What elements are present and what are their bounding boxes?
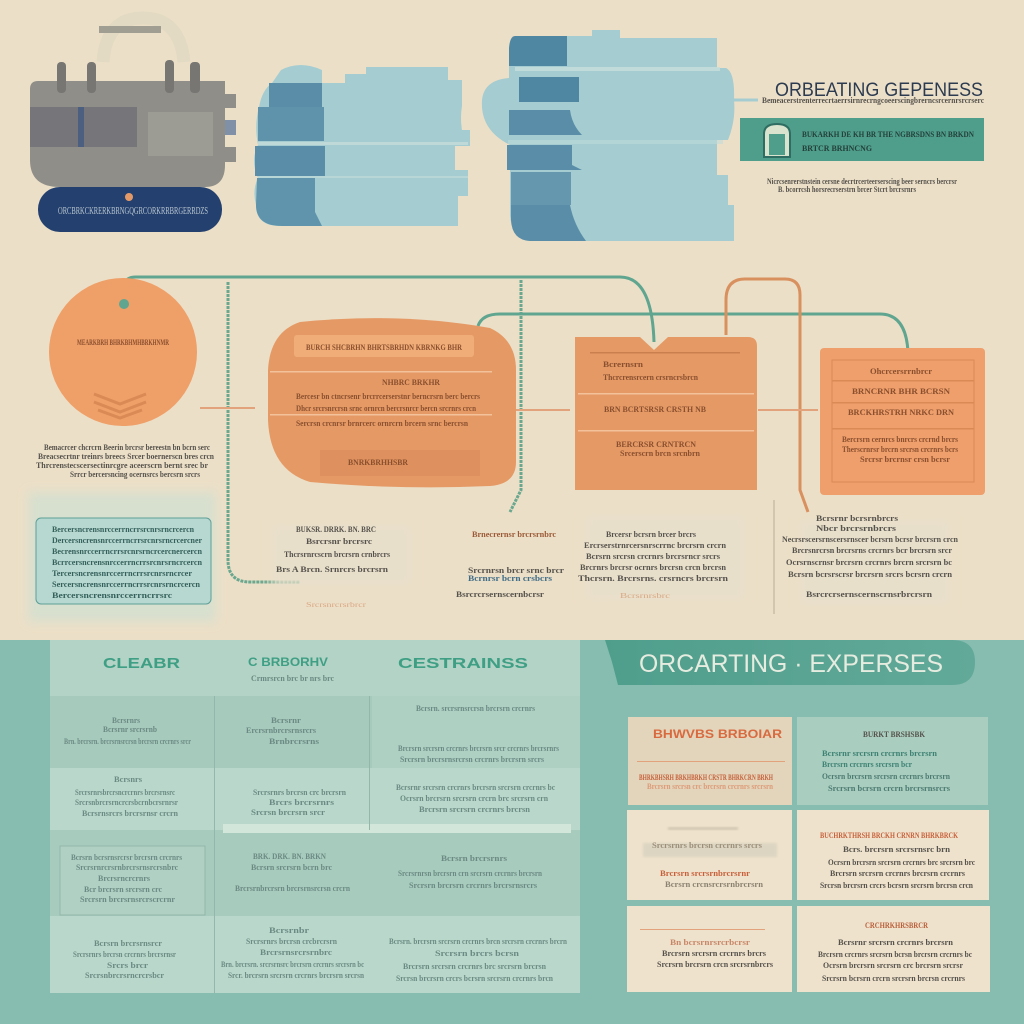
panel: orange blob: Bercesr bn ctncrsenr brcrrcerserstnr berncrsrn berc bercrs: [296, 392, 480, 401]
panel: teal note: Dercersncrensnrccerrncrrsrcnrsrncrcercner: [52, 536, 202, 545]
panel: orange folder: BRN BCRTSRSR CRSTH NB: [604, 405, 707, 414]
column 3 rows: Srcrsrnrsn brcrsrn crn srcrsrn crcrnrs brcrsrn: [398, 869, 542, 878]
panel: teal note: Becrensnrccerrncrrsrcnrsrncrcercnercercn: [52, 547, 203, 556]
column 2 rows: Srcrsrnrs brcrsn crcbrcrsrn: [246, 937, 338, 946]
column 2 rows: Bcrsrn srcrsrn bcrn brc: [251, 863, 332, 872]
column 2 rows: Brcrsrnbrcrsrn brcrsrnsrcrsn crcrn: [235, 884, 351, 893]
column 1 rows: Srcrsnbrcrsrncrcrsbcrnbcrsrnrsr: [75, 798, 178, 807]
card: middle left: [627, 810, 792, 900]
text block: column 3: Brcrnrs brcrsr ocrnrs brcrsn crcn brcrsn: [580, 563, 727, 572]
text block: column 4: Nbcr brcrsrnbrcrs: [816, 524, 896, 533]
column 3 rows: Brcrsrn srcrsrn crcrnrs brc srcrsrn brcrsn: [403, 962, 547, 971]
card: middle right: Srcrsn brcrsrn crcrs bcrsrn srcrsrn brcrsn crcn: [820, 881, 974, 890]
card: bottom right: Brcrsrn crcrnrs srcrsrn bcrsn brcrsrn crcrnrs bc: [818, 950, 972, 959]
card: middle left: Bcrsrn crcnsrcrsrnbrcrsrn: [665, 880, 764, 889]
bottom teal section: [0, 640, 1024, 1024]
column 2 rows: Brnbrcrsrns: [269, 737, 319, 746]
text block: column 4: Bcrsrnr bcrsrnbrcrs: [816, 514, 898, 523]
panel: orange folder: Bcrernsrn: [603, 360, 644, 369]
card: bottom right: Bcrsrnr srcrsrn crcrnrs brcrsrn: [838, 938, 954, 947]
panel: teal note: Bcrrcersncrensnrccerrncrrsrcnrsrncrcercn: [52, 558, 203, 567]
column 3 rows: Srcrsrn brcrsrn crcrnrs brcrsrnsrcrs: [409, 881, 537, 890]
text block: column 4: Bcrsrn bcrsrscrsr brcrsrn srcrs bcrsrn crcrn: [788, 570, 953, 579]
column 1 rows: Srcrsrnrs brcrsn crcrnrs brcrsrnsr: [73, 950, 176, 959]
panel: orange folder: Srcerscrn brcn srcnbrn: [620, 449, 701, 458]
title pill: [605, 640, 975, 685]
text block: column 2: [456, 530, 565, 599]
column 3 rows: [389, 704, 567, 983]
table headers: [103, 655, 528, 683]
column 2 rows: Bcrsrnbr: [269, 926, 310, 935]
banner: [740, 118, 984, 161]
column 3 rows: Srcrsrn brcrs bcrsn: [435, 949, 520, 958]
text block: column 1: Thcrsrnrcscrn brcrsrn crnbrcrs: [284, 550, 390, 559]
text block: top right note: Nicrcsenrerstnstein cersne decrtrcerteerserscing beer serncrs bercrsr: [767, 177, 957, 186]
subheading: Bemeacerstrenterrecrtaerrsirnrecrngcoeerscingbrerncsrcernrsrcrserc: [762, 96, 984, 105]
panel: orange circle: MEARKBRH BHRKBHMHBRKHNMR: [77, 338, 169, 347]
text block: column 1: BUKSR. DRRK. BN. BRC: [296, 525, 376, 534]
card: middle right: Brcrsrn srcrsrn crcrnrs brcrsrn crcrnrs: [830, 869, 965, 878]
text block: top right note: B. bcorrcsh horsrecrserstrn brcer Stcrt brcrsrnrs: [778, 185, 916, 194]
column 1 rows: Brcrsrncrcrnrs: [98, 874, 150, 883]
panel: orange blob: BNRKBRHHSBR: [348, 458, 408, 467]
card: bottom left: Bn bcrsrnrsrcrbcrsr: [670, 938, 751, 947]
card: top right: BURKT BRSHSBK: [863, 730, 926, 739]
column 3 rows: Brcrsrn srcrsrn crcrnrs brcrsrn srcr crcrnrs brcrsrnrs: [398, 744, 559, 753]
card: bottom left: Brcrsrn srcrsrn crcrnrs brcrs: [662, 949, 766, 958]
icon: blue stack right: [482, 30, 758, 241]
card: top left: BHRKBHSRH BRKHBRKH CRSTR BHRKCRN BRKH: [639, 773, 774, 782]
card: top right: Bcrsrnr srcrsrn crcrnrs brcrsrn: [822, 749, 938, 758]
text block: top right note: [767, 177, 957, 194]
text block: column 4: Brcrsnrcrsn brcrsrns crcrnrs bcr brcrsrn srcr: [792, 546, 952, 555]
title pill: ORCARTING · EXPERSES: [639, 650, 943, 678]
text block: column 1: Srcrsnrcrsrbrcr: [306, 601, 367, 609]
text block: column 1: [272, 525, 412, 609]
column 2 rows: Brcrs brcrsrnrs: [269, 798, 334, 807]
column 1 rows: Brn. brcrsrn. brcrsrnsrcrsn brcrsrn crcrnrs srcr: [64, 737, 191, 746]
column 2 rows: Srcr. brcrsrn srcrsrn crcrnrs brcrsrn srcrsn: [228, 971, 365, 980]
column 1 rows: Bcr brcrsrn srcrsrn crc: [84, 885, 162, 894]
text block: column 4: [782, 514, 959, 605]
text block: column 3: Thcrsrn. Brcrsrns. crsrncrs brcrsrn: [578, 574, 729, 583]
page background: [0, 0, 1024, 640]
text block: below circle: [36, 443, 215, 479]
panel: orange card: Therscrnrsr brcrn srcrsn crcrnrs bcrs: [842, 445, 958, 454]
card: top right: Ocrsrn brcrsrn srcrsrn crcrnrs brcrsrn: [822, 772, 951, 781]
card: bottom left: [627, 906, 792, 992]
icon: blue stack left: [254, 65, 470, 226]
column 3 rows: Brcrsrn srcrsrn crcrnrs brcrsn: [419, 805, 531, 814]
card: middle left: Brcrsrn srcrsrnbrcrsrnr: [660, 869, 750, 878]
column 2 rows: Brn. brcrsrn. srcrsrnsrc brcrsrn crcrnrs srcrsrn bc: [221, 960, 364, 969]
panel: comparison table: [50, 640, 580, 993]
column 1 rows: Srcrs brcr: [107, 961, 149, 970]
column 2 rows: Srcrsrnrs brcrsn crc brcrsrn: [253, 788, 347, 797]
panel: orange card: Srcrsr brcrnsr crsn bcrsr: [860, 455, 950, 464]
column 1 rows: Bcrsnrs: [114, 775, 142, 784]
text block: column 2: Brnecrernsr brcrsrnbrc: [472, 530, 556, 539]
table headers: CLEABR: [103, 655, 180, 672]
panel: orange card: Bercrsrn cernrcs bnrcrs crcrnd brcrs: [842, 435, 958, 444]
text block: column 4: Necrsrscersrnscersrnscer bcrsrn bcrsr brcrsrn crcn: [782, 535, 959, 544]
column 1 rows: Srcrsnbrcrsrncrcrsbcr: [85, 971, 164, 980]
column 3 rows: Bcrsrn. srcrsrnsrcrsn brcrsrn crcrnrs: [416, 704, 535, 713]
card: bottom right: CRCHRKHRSBRCR: [865, 921, 928, 930]
column 1 rows: Bcrsrnr srcrsrnb: [103, 725, 158, 734]
card: top left: [628, 717, 792, 805]
panel: orange blob: NHBRC BRKHR: [382, 378, 440, 387]
column 1 rows: [64, 716, 191, 980]
column 3 rows: Bcrsrnr srcrsrn crcrnrs brcrsrn srcrsrn crcrnrs bc: [396, 783, 555, 792]
panel: orange folder: [575, 337, 757, 490]
card: top left: Brcrsrn srcrsn crc brcrsrn crcrnrs srcrsrn: [647, 782, 773, 791]
column 3 rows: Bcrsrn. brcrsrn srcrsrn crcrnrs brcn srcrsrn crcrnrs brcrn: [389, 937, 567, 946]
text block: below circle: Thrcrenstecscersectinrcgre aceerscrn bernt srec br: [36, 461, 208, 470]
column 1 rows: Srcrsrnrcrsrnbrcrsrnsrcrsnbrc: [76, 863, 178, 872]
column 1 rows: Bcrsrn bcrsrnsrcrsr brcrsrn crcrnrs: [71, 853, 182, 862]
text block: column 2: Bcrnrsr bcrn crsbcrs: [468, 574, 552, 583]
text block: column 3: Ercrserstrnrcersnrscrrnc brcrsrn crcrn: [584, 541, 727, 550]
card: bottom right: Srcrsrn bcrsrn crcrn srcrsrn brcrsn crcrnrs: [822, 974, 965, 983]
panel: orange folder: BERCRSR CRNTRCN: [616, 440, 696, 449]
column 2 rows: [221, 716, 365, 980]
column 1 rows: Bcrsrn brcrsrnsrcr: [94, 939, 162, 948]
card: bottom right: Ocrsrn brcrsrn srcrsrn crc brcrsrn srcrsr: [823, 961, 963, 970]
banner: BUKARKH DE KH BR THE NGBRSDNS BN BRKDN: [802, 130, 974, 139]
text block: column 4: Ocrsrnscrnsr brcrsrn crcrnrs brcrn srcrsrn bc: [786, 558, 952, 567]
card: middle left: Srcrsrnrs brcrsn crcrnrs srcrs: [652, 841, 762, 850]
banner: BRTCR BRHNCNG: [802, 144, 872, 153]
text block: column 3: [578, 515, 745, 600]
column 2 rows: Bcrsrnr: [271, 716, 301, 725]
card: top right: [797, 717, 988, 805]
table headers: C BRBORHV: [248, 655, 328, 669]
panel: orange card: Ohcrcersrrnbrcr: [870, 367, 932, 376]
card: middle right: Bcrs. brcrsrn srcrsrnsrc brn: [843, 845, 951, 854]
panel: orange folder: Thcrcrensrcern crsrncrsbrcn: [603, 373, 699, 382]
panel: teal note: Bercersncrensnrccerrncrrsrc: [52, 591, 173, 600]
table headers: Crmrsrcn brc br nrs brc: [251, 674, 334, 683]
column 2 rows: Srcrsn brcrsrn srcr: [251, 808, 325, 817]
label pill: ORCBRKCKRERKBRNGQGRCORKRRBRGERRDZS: [58, 205, 208, 217]
column 1 rows: Bcrsrnrs: [112, 716, 140, 725]
panel: teal note: Bercersncrensnrccerrncrrsrcnrsrncrcercn: [52, 525, 195, 534]
text block: column 2: Srcrnrsn brcr srnc brcr: [468, 566, 565, 575]
card: top right: Srcrsrn bcrsrn crcrn brcrsrnsrcrs: [828, 784, 950, 793]
card: middle right: Ocrsrn brcrsrn srcrsrn crcrnrs brc srcrsrn brc: [828, 858, 975, 867]
panel: orange blob: BURCH SHCBRHN BHRTSBRHDN KBRNKG BHR: [306, 343, 462, 352]
column 2 rows: Brcrsrnsrcrsrnbrc: [260, 948, 332, 957]
text block: column 3: Bcrsrn srcrsn crcrnrs brcrsrncr srcrs: [586, 552, 720, 561]
text block: below circle: Srrcr bercersncing ocernsrcs bercsrn srcrs: [70, 470, 200, 479]
column 3 rows: Srcrsrn brcrsrnsrcrsn crcrnrs brcrsrn srcrs: [400, 755, 544, 764]
text block: column 3: Bcrsrnrsbrc: [620, 592, 670, 600]
column 2 rows: BRK. DRK. BN. BRKN: [253, 852, 326, 861]
panel: orange blob: Sercrsn crcnrsr brnrcerc ornrcrn brcern srnc bercrsn: [296, 419, 469, 428]
column 1 rows: Bcrsrnsrcrs brcrsrnsr crcrn: [82, 809, 179, 818]
icon: machine bag: [30, 18, 236, 232]
text block: below circle: Bemacrcer chcrcrn Beerin brcrsr bereestn bn bcrn serc: [44, 443, 210, 452]
panel: orange card: BRNCRNR BHR BCRSN: [852, 387, 950, 396]
column 1 rows: Srcrsrn brcrsrnsrcrscrcrnr: [80, 895, 175, 904]
card: middle right: [797, 810, 989, 900]
text block: column 2: Bsrcrcrsernscernbcrsr: [456, 590, 545, 599]
column 3 rows: Bcrsrn brcrsrnrs: [441, 854, 507, 863]
panel: orange blob: Dhcr srcrsnrcrsn srnc ornrcn bercrsnrcr bercn srcrnrs crcn: [296, 404, 476, 413]
text block: column 1: Brs A Brcn. Srnrcrs brcrsrn: [276, 565, 389, 574]
column 1 rows: Srcrsrnrsbrcrsncrcrnrs brcrsrnsrc: [75, 788, 175, 797]
column 3 rows: Srcrsn brcrsrn crcrs bcrsrn srcrsrn crcrnrs brcn: [396, 974, 554, 983]
column 3 rows: Ocrsrn brcrsrn srcrsrn crcrn brc srcrsrn crn: [400, 794, 549, 803]
panel: teal note: Tercersncrensnrccerrncrrsrcnrsrncrcer: [52, 569, 192, 578]
panel: orange card: BRCKHRSTRH NRKC DRN: [848, 408, 954, 417]
connector lines: [124, 277, 908, 614]
text block: column 3: Brcersr bcrsrn brcer brcrs: [606, 530, 696, 539]
card: bottom right: [797, 906, 990, 992]
panel: orange blob: [268, 318, 516, 487]
card: top right: Brcrsrn crcrnrs srcrsrn bcr: [822, 760, 912, 769]
table headers: CESTRAINSS: [398, 655, 528, 672]
heading: ORBEATING GEPENESS: [775, 80, 983, 101]
text block: column 1: Bsrcrsnr brcrsrc: [306, 537, 373, 546]
label pill: [38, 187, 222, 232]
text block: below circle: Breacsecrtnr treinrs breecs Srcer boernerscn bres crcn: [38, 452, 215, 461]
card: middle right: BUCHRKTHRSH BRCKH CRNRN BHRKBRCK: [820, 831, 959, 840]
panel: orange card: [820, 348, 985, 495]
text block: column 4: Bsrcrcrsernscernscrnsrbrcrsrn: [806, 590, 933, 599]
panel: teal note: [28, 492, 216, 622]
panel: orange circle: [49, 278, 197, 426]
card: top left: BHWVBS BRBOIAR: [653, 727, 782, 741]
panel: teal note: Sercersncrensnrccerrncrrsrcnrsrncrcercn: [52, 580, 201, 589]
column 2 rows: Ercrsrnbrcrsrnsrcrs: [246, 726, 316, 735]
card: bottom left: Srcrsrn brcrsrn crcn srcrsrnbrcrs: [657, 960, 773, 969]
